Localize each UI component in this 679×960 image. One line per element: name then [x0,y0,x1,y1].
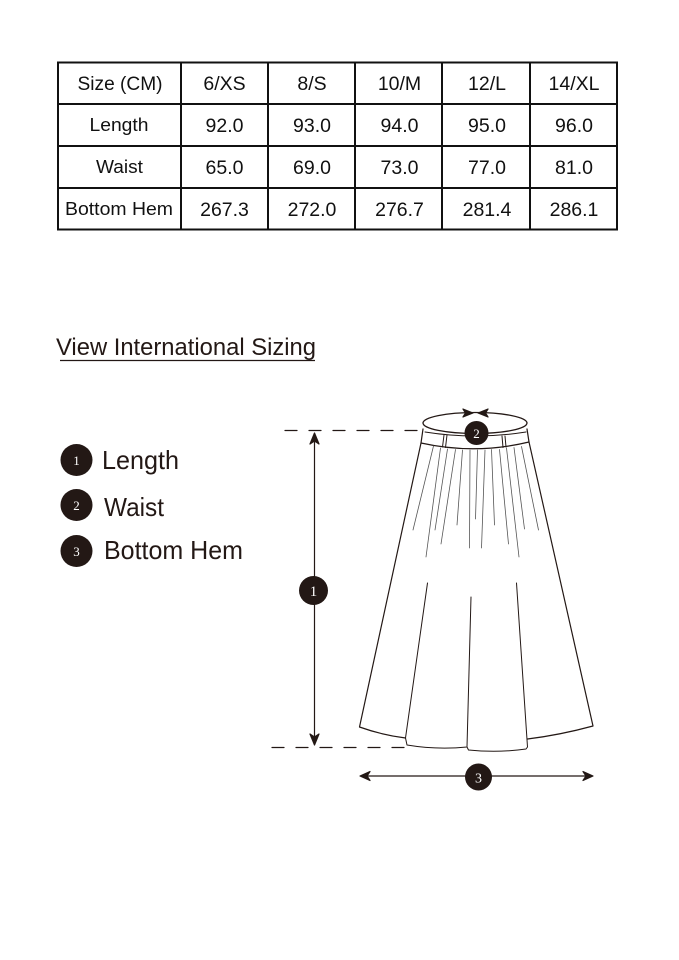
table row: bottom hem: 267.3 [200,199,249,221]
skirt waistband [421,412,529,449]
table row: bottom hem: 286.1 [550,199,598,221]
table row: waist: 77.0 [468,157,506,179]
table header row: Size (CM) [78,74,162,95]
skirt lower panels [406,583,528,751]
legend item: bottom hem [60,535,243,567]
skirt outline [360,442,593,739]
table row: waist: 81.0 [555,157,593,179]
table header row: 14/XL [549,73,600,95]
table row: bottom hem: Bottom Hem [65,198,173,219]
dimension 3: bottom hem arrow [360,764,593,790]
table row: length: 95.0 [468,115,506,137]
table row: waist: Waist [96,156,143,177]
table header row [78,73,600,95]
table header row: 10/M [378,73,421,95]
table row: bottom hem: 272.0 [288,199,337,221]
table header row: 12/L [468,73,506,95]
table row: length [90,114,593,137]
legend item: waist: Waist [104,492,165,522]
legend [60,444,243,567]
legend item: waist: 2 [73,498,80,513]
table row: length: 92.0 [206,115,244,137]
dimension 2: waist arrows [463,409,488,445]
dimension 2: waist arrows: 2 [473,426,480,441]
table row: length: 94.0 [381,115,419,137]
legend item: bottom hem: Bottom Hem [104,535,243,565]
heading: view international sizing: View International Sizing [56,334,316,361]
skirt diagram [272,409,593,790]
table row: waist [96,156,593,179]
dimension 1: length arrow [272,430,420,748]
table row: length: 96.0 [555,115,593,137]
legend item: bottom hem: 3 [73,544,80,559]
table row: length: Length [90,114,148,135]
table row: waist: 73.0 [381,157,419,179]
table row: bottom hem: 281.4 [463,199,512,221]
legend item: length [60,444,179,476]
table header row: 6/XS [203,73,246,95]
size table [58,62,617,230]
table row: bottom hem [65,198,598,221]
legend item: waist [60,489,165,522]
legend item: length: Length [102,445,179,475]
dimension 1: length arrow: 1 [310,584,317,600]
table header row: 8/S [297,73,327,95]
table row: waist: 65.0 [206,157,244,179]
table row: waist: 69.0 [293,157,331,179]
skirt pleats [413,446,538,557]
table row: length: 93.0 [293,115,331,137]
table grid [58,62,617,230]
table row: bottom hem: 276.7 [375,199,424,221]
legend item: length: 1 [73,453,80,468]
dimension 3: bottom hem arrow: 3 [475,772,482,786]
